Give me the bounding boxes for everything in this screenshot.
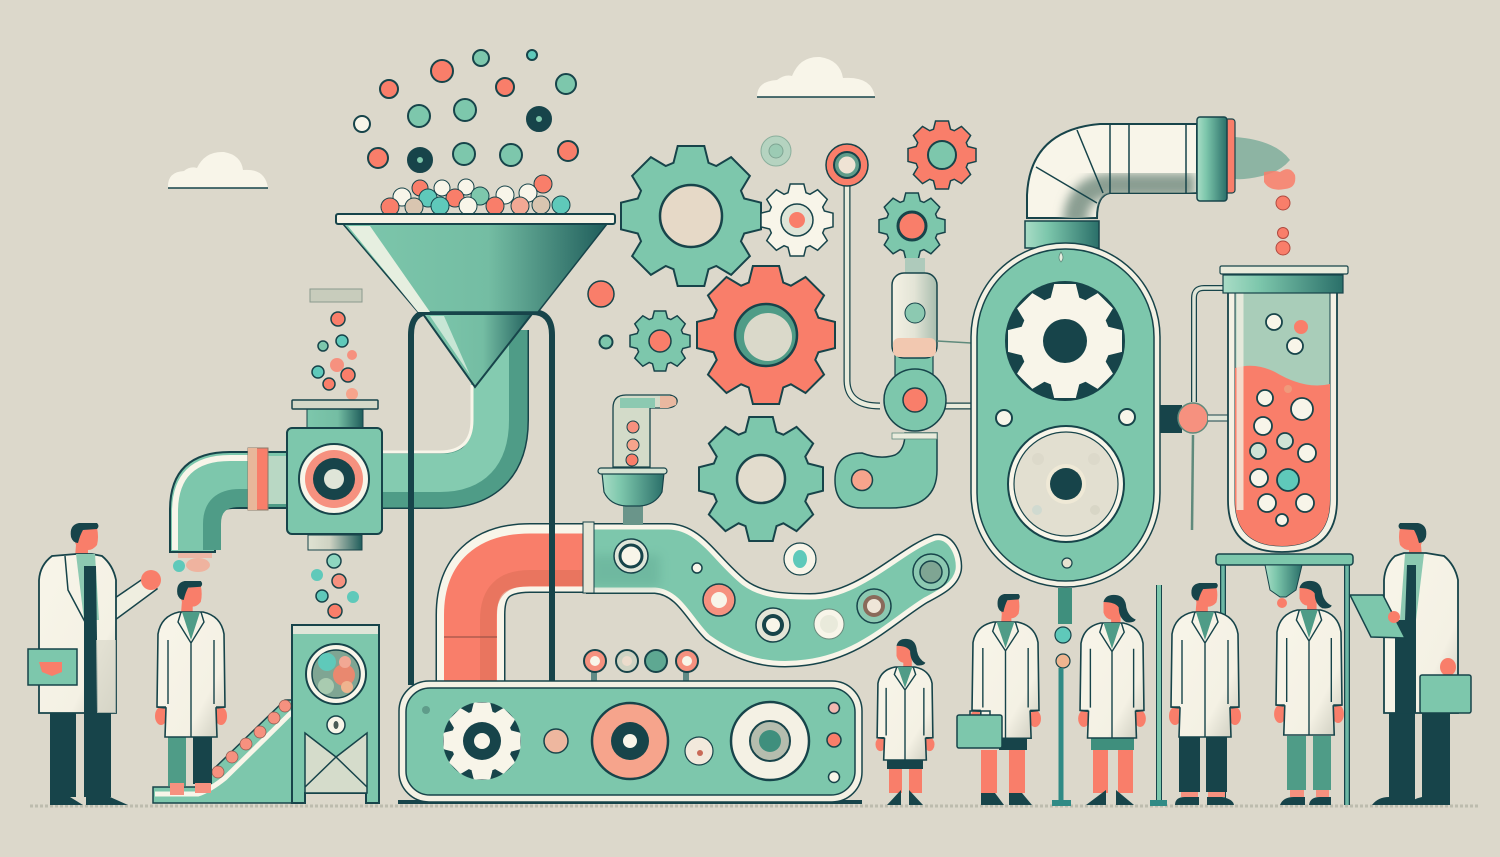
person 2: scientist beside man — [155, 581, 227, 795]
person 3: woman centre — [875, 639, 935, 805]
bottom machine — [398, 681, 862, 804]
gear: large coral — [697, 266, 835, 404]
person 6: scientist dark trousers — [1169, 583, 1241, 805]
falling balls above funnel — [354, 50, 578, 172]
gauge line and valve assembly — [826, 144, 972, 508]
big cream pipe — [1025, 117, 1295, 248]
balls below valve — [173, 554, 359, 618]
funnel frame — [411, 312, 552, 685]
gear: small teal left — [630, 311, 690, 371]
big capsule machine — [971, 243, 1160, 587]
person 7: woman teal trousers — [1274, 581, 1344, 805]
main funnel — [336, 214, 615, 387]
gear: teal lower — [699, 417, 823, 541]
left hopper machine — [153, 625, 379, 803]
balls above valve — [312, 312, 358, 400]
small funnel and bent pipe — [598, 395, 677, 525]
left pipe with collar — [170, 448, 290, 558]
gauge below lower gear — [784, 543, 816, 575]
gear: cream small — [761, 184, 833, 256]
coral pipe — [444, 558, 590, 682]
indicator knobs on machine — [584, 650, 698, 683]
cloud left — [168, 152, 268, 188]
person 1: tall man left — [28, 523, 161, 805]
person 8: tall man right — [1350, 523, 1471, 805]
small balls by gears — [588, 136, 791, 348]
gear: large teal top — [621, 146, 761, 286]
cloud top — [757, 57, 875, 97]
ball pile in funnel — [381, 175, 570, 216]
gear: small coral top — [908, 121, 976, 189]
right elbow pipe — [380, 330, 500, 480]
vertical service lines — [1052, 585, 1167, 806]
test tube stand — [1216, 554, 1353, 805]
small top disk — [310, 289, 362, 302]
person 4: scientist with case — [957, 594, 1041, 805]
test tube — [1220, 266, 1348, 552]
teal conveyor band — [583, 522, 958, 664]
person 5: woman scientist — [1078, 595, 1146, 805]
gear: small teal right — [879, 193, 945, 259]
valve box — [287, 400, 382, 550]
droplets — [1276, 196, 1290, 255]
side connector — [1160, 288, 1228, 530]
